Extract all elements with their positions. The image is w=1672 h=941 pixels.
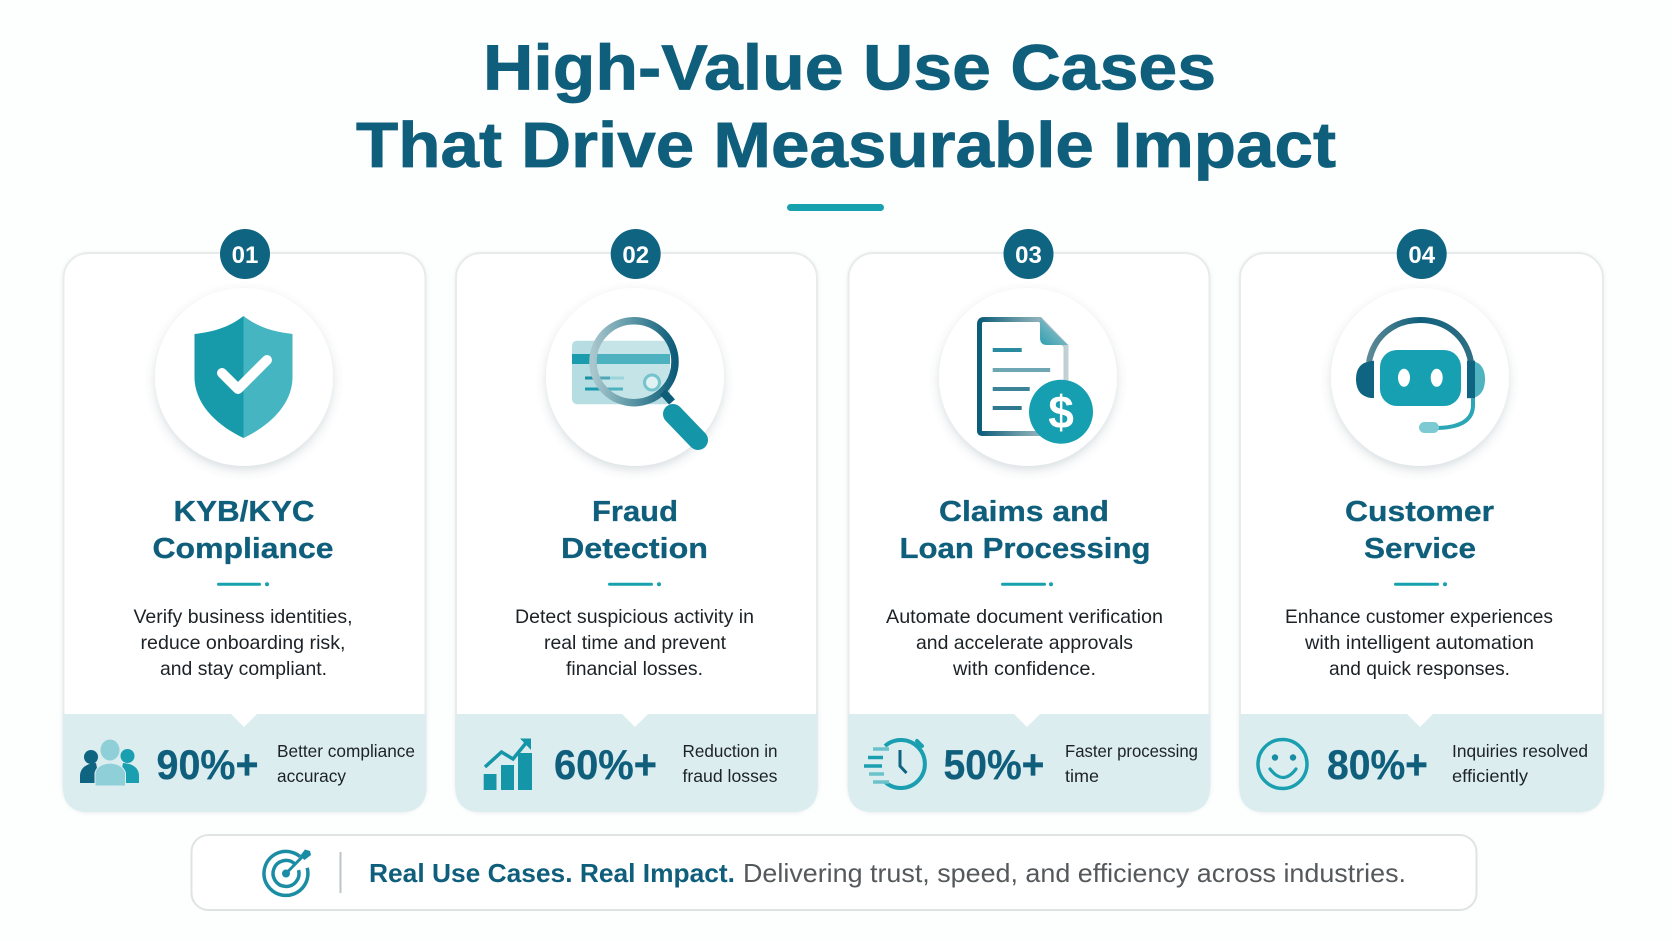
description bbox=[886, 606, 1163, 680]
panel: Claims and Loan Processing bbox=[848, 229, 1210, 812]
icon: clock with speed lines bbox=[864, 740, 925, 788]
description: Detect suspicious activity in bbox=[515, 606, 754, 628]
heading: Detection bbox=[561, 533, 708, 565]
card frame bbox=[456, 253, 817, 811]
description: with confidence. bbox=[952, 658, 1096, 680]
icon: target with arrow bbox=[264, 850, 311, 895]
description: and stay compliant. bbox=[160, 658, 327, 680]
stat band bbox=[1240, 714, 1604, 812]
number badge 03: 03 bbox=[1015, 242, 1042, 269]
title: High-Value Use Cases bbox=[483, 32, 1216, 104]
number badge 04: 04 bbox=[1408, 242, 1436, 269]
panel: Fraud Detection bbox=[456, 229, 818, 812]
icon: rising bar chart bbox=[484, 738, 532, 790]
stat label: Reduction in bbox=[682, 741, 778, 761]
description: and accelerate approvals bbox=[916, 632, 1133, 654]
description: Enhance customer experiences bbox=[1285, 606, 1553, 628]
icon: smiley bbox=[1258, 740, 1307, 788]
panel: bottom banner bbox=[192, 835, 1476, 910]
stat label: Inquiries resolved bbox=[1452, 741, 1588, 761]
number badge 01 bbox=[220, 229, 270, 279]
heading bbox=[152, 496, 334, 565]
stat label: Faster processing bbox=[1065, 741, 1198, 761]
heading: Fraud bbox=[592, 496, 678, 528]
number badge 03 bbox=[1004, 229, 1054, 279]
number badge 02: 02 bbox=[622, 242, 649, 269]
description: reduce onboarding risk, bbox=[140, 632, 346, 654]
banner message: Delivering trust, speed, and efficiency across industries. bbox=[743, 858, 1406, 888]
separator bbox=[340, 852, 342, 893]
stat label bbox=[682, 741, 778, 786]
stat label: time bbox=[1065, 766, 1099, 786]
heading: Customer bbox=[1345, 496, 1494, 528]
title underline bbox=[787, 204, 884, 211]
icon: magnifier over card bbox=[546, 288, 724, 466]
title: That Drive Measurable Impact bbox=[356, 109, 1336, 181]
heading bbox=[1345, 496, 1494, 565]
heading: Service bbox=[1364, 533, 1476, 565]
description: Automate document verification bbox=[886, 606, 1163, 628]
heading: Loan Processing bbox=[900, 533, 1150, 565]
stat band bbox=[848, 714, 1210, 812]
card frame bbox=[1240, 253, 1603, 811]
title bbox=[356, 32, 1336, 181]
accent divider bbox=[217, 582, 269, 586]
description bbox=[134, 606, 352, 680]
stat label: efficiently bbox=[1452, 766, 1528, 786]
icon: shield with check bbox=[155, 288, 333, 466]
stat label bbox=[277, 741, 415, 786]
icon: people bbox=[80, 740, 139, 786]
heading: Compliance bbox=[152, 533, 334, 565]
description bbox=[1285, 606, 1553, 680]
description: financial losses. bbox=[566, 658, 703, 680]
stat 60%+: 60%+ bbox=[554, 741, 657, 788]
stat band bbox=[456, 714, 818, 812]
banner message bbox=[369, 858, 1406, 888]
icon: document with dollar bbox=[939, 288, 1117, 466]
banner message: Real Use Cases. Real Impact. bbox=[369, 858, 735, 888]
stat band bbox=[63, 714, 426, 812]
heading bbox=[561, 496, 708, 565]
heading: KYB/KYC bbox=[174, 496, 315, 528]
stat 90%+: 90%+ bbox=[156, 741, 258, 788]
stat label: fraud losses bbox=[682, 766, 778, 786]
heading bbox=[900, 496, 1150, 565]
description bbox=[515, 606, 754, 680]
panel: KYB/KYC Compliance bbox=[63, 229, 426, 812]
accent divider bbox=[1001, 582, 1053, 586]
number badge 04 bbox=[1397, 229, 1447, 279]
banner frame bbox=[192, 835, 1476, 910]
accent divider bbox=[1394, 582, 1447, 586]
number badge 01: 01 bbox=[232, 242, 258, 269]
stat label bbox=[1452, 741, 1588, 786]
stat label: accuracy bbox=[277, 766, 346, 786]
stat label bbox=[1065, 741, 1198, 786]
description: and quick responses. bbox=[1329, 658, 1510, 680]
description: Verify business identities, bbox=[134, 606, 352, 628]
card frame bbox=[64, 253, 426, 811]
number badge 02 bbox=[611, 229, 661, 279]
accent divider bbox=[608, 582, 661, 586]
stat 80%+: 80%+ bbox=[1327, 741, 1428, 788]
icon: support bot with headset bbox=[1331, 288, 1509, 466]
card frame bbox=[848, 253, 1210, 811]
stat label: Better compliance bbox=[277, 741, 415, 761]
panel: Customer Service bbox=[1240, 229, 1604, 812]
description: real time and prevent bbox=[544, 632, 727, 654]
icon: document with dollar: $ bbox=[1048, 386, 1074, 438]
heading: Claims and bbox=[939, 496, 1109, 528]
description: with intelligent automation bbox=[1304, 632, 1534, 654]
stat 50%+: 50%+ bbox=[944, 741, 1044, 788]
